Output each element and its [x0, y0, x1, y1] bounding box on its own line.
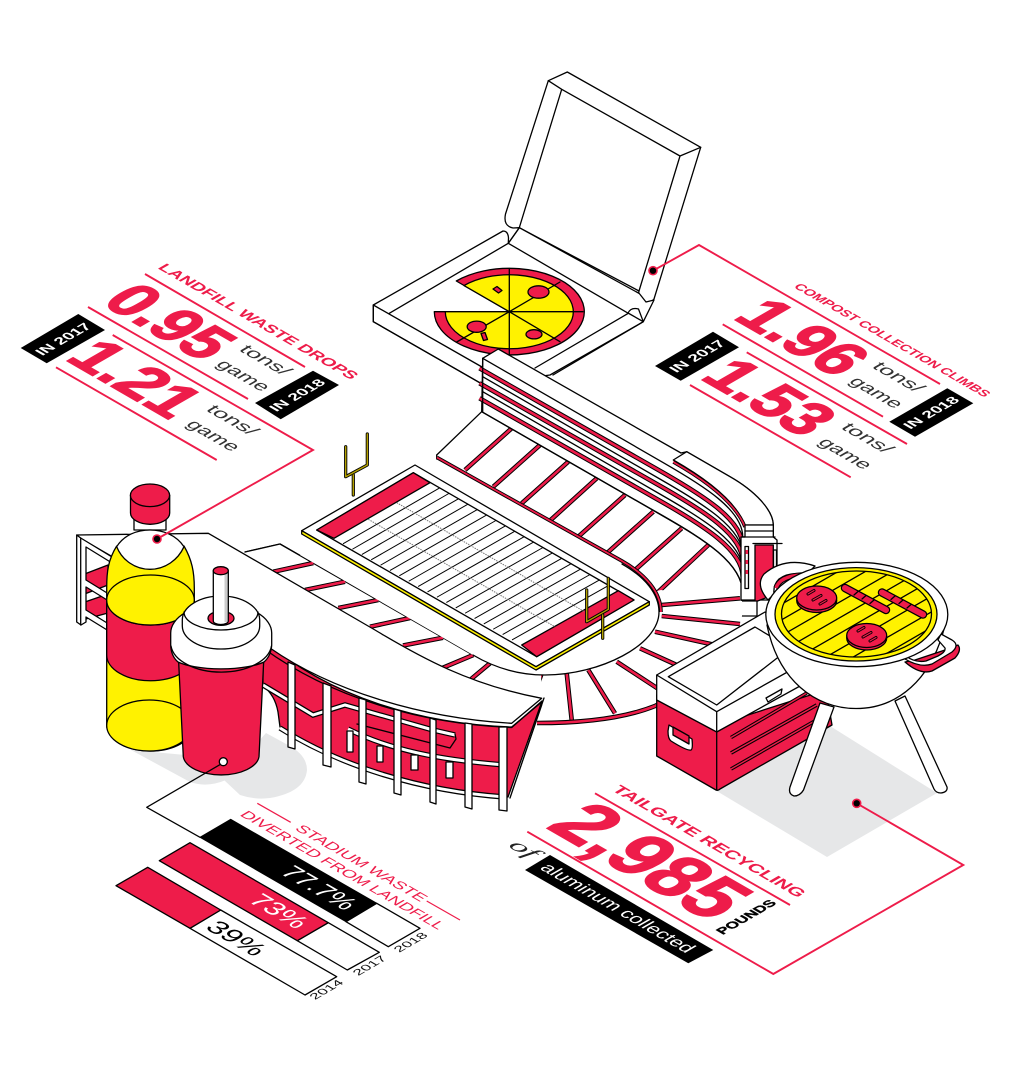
bar 2014: [116, 867, 348, 1002]
bar 2014: 2014: [307, 978, 348, 1002]
grill left handle: [760, 562, 815, 600]
unit: game: [212, 357, 276, 394]
bottle shoulder: [117, 530, 184, 569]
callout dot: [152, 534, 162, 544]
heading: landfill waste drops: LANDFILL WASTE DROPS: [154, 261, 362, 382]
cup body: [178, 655, 264, 775]
unit: tons/: [868, 359, 930, 395]
goalpost north: [346, 434, 367, 495]
bowl seating: [500, 590, 742, 723]
panel: stadium waste diverted: [116, 758, 460, 1002]
hot dog 1: [845, 588, 886, 610]
bottle cap: [130, 484, 170, 524]
heading: stadium waste diverted from landfill: DIVERTED FROM LANDFILL: [236, 809, 449, 932]
callout line: bottle to landfill panel: [113, 335, 313, 539]
rule: [595, 793, 790, 905]
pizza: [434, 268, 584, 355]
bottle ellipses: [107, 575, 194, 625]
bar 2018: [200, 819, 431, 954]
cooler: [657, 612, 832, 790]
cooler latch: [766, 689, 782, 702]
badge: in 2017: [21, 314, 105, 363]
pizza box base: [373, 228, 654, 384]
panel: landfill waste: [21, 261, 362, 544]
grill grate: [775, 568, 937, 661]
panel: compost: [648, 245, 994, 477]
unit: [212, 342, 297, 394]
bar 2017: [159, 843, 390, 978]
badge: aluminum collected: aluminum collected: [536, 860, 701, 956]
yard lines: [343, 488, 609, 640]
callout dot: [852, 798, 862, 808]
badge: in 2017: IN 2017: [665, 337, 729, 375]
cup lid rim: [171, 604, 272, 669]
bar 2017: 2017: [351, 954, 390, 978]
grill legs: [790, 696, 947, 796]
cup: [171, 567, 272, 775]
shadow: grill and cooler: [715, 726, 937, 857]
of: of: [503, 836, 551, 864]
football field: [302, 465, 649, 670]
unit: tons/: [202, 402, 264, 438]
field plate: [300, 434, 661, 675]
badge: in 2017: IN 2017: [31, 320, 95, 358]
cooler lid: [657, 612, 830, 732]
bar 2018: 77.7%: [274, 862, 364, 914]
bar 2014: 39%: [199, 917, 273, 960]
bar 2017: 73%: [242, 890, 315, 933]
grill: [760, 562, 960, 797]
unit: [182, 402, 264, 454]
upper stand seating: [437, 412, 743, 720]
badge: in 2018: [255, 371, 339, 419]
heading: stadium waste diverted from landfill: [236, 803, 460, 932]
cooler body: [657, 690, 832, 790]
bottle: [107, 484, 194, 751]
burger 2: [847, 624, 887, 650]
callout line: pizza box to compost panel: [653, 245, 940, 384]
columns: [288, 662, 507, 811]
stat 2,985: 2,985: [530, 791, 772, 931]
bar 2018: 2018: [392, 931, 431, 954]
rules: [56, 274, 305, 460]
unit: game: [182, 417, 246, 454]
callout line: grill to tailgate panel: [527, 803, 963, 974]
heading: stadium waste diverted from landfill: STADIUM WASTE: [291, 823, 431, 904]
end zone north: [317, 473, 430, 538]
badge: in 2018: IN 2018: [265, 376, 329, 414]
end zone south: [522, 591, 634, 657]
badge: in 2018: IN 2018: [899, 394, 963, 431]
callout line: cup to bars: [147, 763, 223, 837]
left stand roof: [77, 533, 542, 728]
shadow: bottle and cup: [131, 733, 307, 799]
panel: tailgate recycling: [503, 783, 963, 974]
callout dot: [648, 266, 658, 276]
unit: pounds: POUNDS: [712, 897, 780, 937]
cup dot: [219, 758, 227, 766]
cooler grooves: [731, 693, 820, 769]
bottle red band: [107, 600, 194, 681]
cooler handle: [668, 725, 692, 750]
badge: aluminum collected: [525, 855, 713, 963]
pizza box lid: [505, 72, 701, 302]
cup lid dome: [182, 596, 260, 649]
upper stand roof tiers: [480, 349, 773, 593]
upper stand: [437, 349, 782, 720]
left stand seating: [245, 544, 542, 700]
badge: in 2018: [889, 388, 973, 437]
unit: tons/: [235, 342, 297, 378]
bottle neck: [134, 515, 166, 530]
unit: game: [814, 435, 878, 472]
hash marks: [368, 503, 585, 627]
unit: game: [845, 374, 909, 411]
heading: tailgate recycling: TAILGATE RECYCLING: [608, 783, 809, 900]
left stand: [77, 533, 544, 811]
badge: in 2017: [655, 332, 739, 381]
burger 1: [797, 586, 837, 612]
rules: [690, 324, 907, 477]
straw: [213, 567, 228, 624]
straw hole: [208, 611, 234, 625]
heading: compost collection climbs: COMPOST COLLECTION CLIMBS: [790, 281, 994, 399]
stat 1.53: 1.53: [687, 349, 853, 445]
bottle body: [107, 546, 194, 751]
hot dog 2: [882, 592, 923, 614]
balcony posts: [347, 731, 453, 778]
grill right handle: [905, 634, 959, 672]
pizza toppings: [467, 286, 549, 340]
grill rim: [766, 562, 948, 667]
grill bowl: [767, 625, 945, 708]
goalpost south: [587, 578, 608, 638]
stat 0.95: 0.95: [88, 274, 252, 369]
stat 1.96: 1.96: [720, 289, 886, 385]
unit: tons/: [837, 420, 899, 456]
unit: [845, 359, 930, 411]
stand end tower: [741, 525, 782, 616]
stat 1.21: 1.21: [52, 330, 220, 427]
rack: [77, 535, 112, 633]
unit: [814, 420, 899, 472]
left stand red wall: [263, 640, 544, 798]
